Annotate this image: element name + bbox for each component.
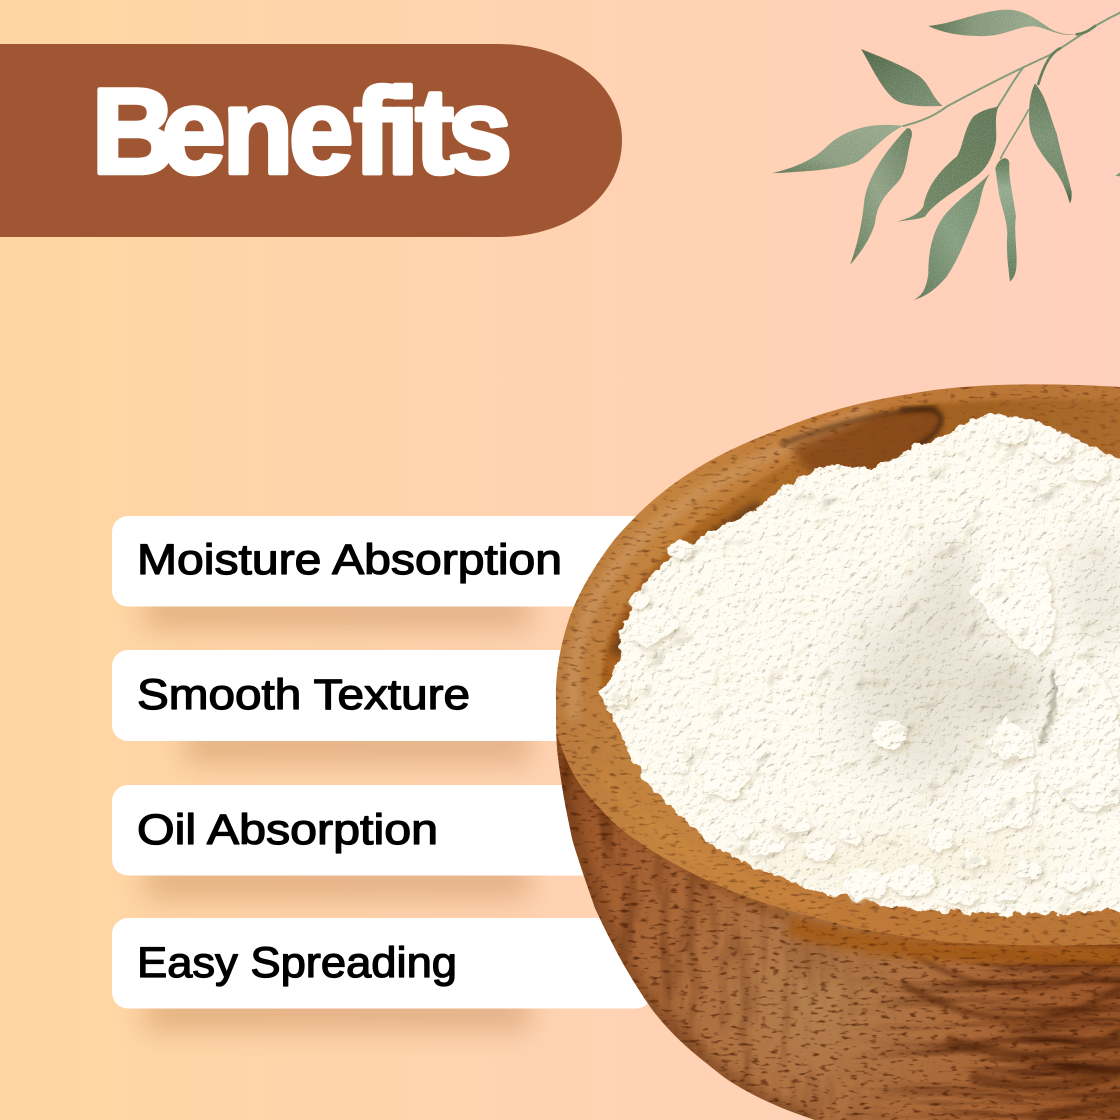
leaf 6: [913, 173, 990, 300]
card: Easy Spreading: [112, 918, 652, 1008]
under-rim shadow: [654, 852, 790, 921]
leaf 4: [850, 128, 912, 265]
rim front highlight: [600, 770, 830, 910]
flour mound: [607, 413, 1120, 914]
leaf 2: [861, 49, 943, 106]
rim band: [540, 370, 1120, 970]
leaf 1: [928, 10, 1077, 36]
stems: [903, 12, 1120, 158]
leaf 3: [772, 125, 903, 173]
inner wall grain: [600, 400, 1120, 570]
leaf 7: [995, 158, 1017, 282]
inner wall: [598, 398, 1120, 734]
header banner: [0, 44, 622, 237]
leaf tip at right edge: [1115, 172, 1120, 177]
decorative leaf branch: [772, 10, 1120, 300]
bowl wood: [540, 370, 1120, 1120]
growth ring arcs: [905, 950, 1120, 1118]
card: Smooth Texture: [112, 650, 652, 741]
flour clumps: [601, 416, 1120, 905]
leaf 8: [1029, 83, 1072, 203]
rim highlight: [572, 412, 870, 720]
card: Easy Spreading: Easy Spreading: [137, 939, 457, 987]
banner shape: [0, 44, 622, 237]
inner wall shadow: [615, 505, 760, 655]
knot dark edge: [900, 409, 941, 448]
bowl body: [540, 720, 1120, 1120]
inner wall dark knot: [788, 404, 940, 474]
title: Benefits: [92, 63, 512, 200]
flour: [601, 413, 1120, 914]
card: Oil Absorption: Oil Absorption: [137, 806, 438, 854]
edge darkening: [558, 757, 815, 1120]
card: Moisture Absorption: [112, 516, 652, 606]
card shadows: [145, 592, 530, 1030]
leaf 5: [897, 107, 998, 222]
golden band under rim: [790, 925, 1120, 956]
knot streak: [780, 408, 935, 445]
flour shading: [730, 530, 1120, 890]
card: Moisture Absorption: Moisture Absorption: [137, 536, 562, 584]
rim grain: [540, 370, 1120, 940]
benefit list: [112, 516, 652, 1030]
card: Oil Absorption: [112, 785, 652, 876]
card: Smooth Texture: Smooth Texture: [137, 671, 470, 719]
wooden bowl with flour: [540, 370, 1120, 1120]
